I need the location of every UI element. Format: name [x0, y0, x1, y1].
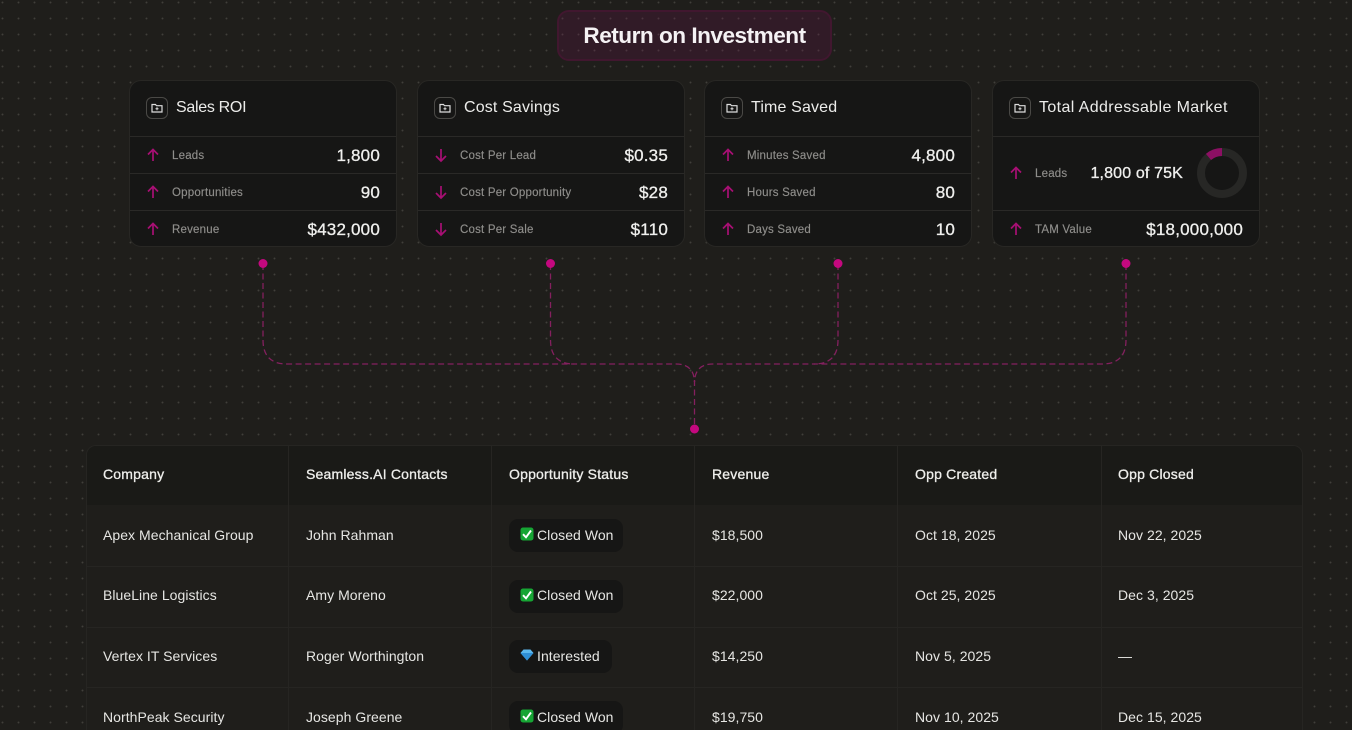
- metric: minutes saved: Minutes Saved: [747, 150, 826, 162]
- heading: sales roi: Sales ROI: [176, 99, 246, 116]
- row: vertex it services: [103, 640, 1132, 673]
- row: apex mechanical group: $18,500: [712, 527, 763, 543]
- status: interested: Interested: [537, 648, 600, 664]
- metric: opportunities: Opportunities: [172, 187, 243, 199]
- metric: minutes saved: 4,800: [911, 146, 955, 165]
- table header: Opp Closed: [1118, 466, 1194, 482]
- metric: cost per lead: [418, 136, 684, 173]
- row: apex mechanical group: [103, 519, 1202, 552]
- heading: time saved: Time Saved: [751, 99, 837, 116]
- row: vertex it services: Roger Worthington: [306, 648, 424, 664]
- table header: Opp Created: [915, 466, 997, 482]
- row: vertex it services: —: [1118, 648, 1132, 664]
- row: apex mechanical group: Apex Mechanical Group: [103, 527, 253, 543]
- row: northpeak security: NorthPeak Security: [103, 709, 225, 725]
- status: interested: [509, 640, 612, 673]
- table header: Company: [103, 466, 164, 482]
- table: [86, 445, 1303, 730]
- row: blueline logistics: $22,000: [712, 587, 763, 603]
- status: closed won: [509, 580, 623, 613]
- status: closed won: Closed Won: [537, 587, 614, 603]
- panel: time saved: [704, 80, 972, 247]
- status: closed won: Closed Won: [537, 709, 614, 725]
- metric: revenue: Revenue: [172, 224, 219, 236]
- metric: leads of tam: Leads: [1035, 168, 1067, 180]
- metric: cost per lead: Cost Per Lead: [460, 150, 536, 162]
- metric: leads: Leads: [172, 150, 204, 162]
- panel: total addressable market: [992, 80, 1260, 247]
- status: closed won: [509, 701, 623, 730]
- donut chart: [1197, 148, 1247, 198]
- row: northpeak security: [103, 701, 1202, 730]
- row: northpeak security: Nov 10, 2025: [915, 709, 999, 725]
- row: blueline logistics: [103, 580, 1194, 613]
- row: blueline logistics: Amy Moreno: [306, 587, 386, 603]
- status: closed won: [509, 519, 623, 552]
- metric: revenue: $432,000: [307, 220, 380, 239]
- metric: hours saved: [705, 173, 971, 210]
- table header: [87, 446, 1304, 505]
- title: Return on Investment: [583, 23, 806, 48]
- row: northpeak security: $19,750: [712, 709, 763, 725]
- metric: cost per lead: $0.35: [624, 146, 668, 165]
- row: northpeak security: Dec 15, 2025: [1118, 709, 1202, 725]
- metric: revenue: [130, 210, 396, 247]
- panel: cost savings: [417, 80, 685, 247]
- table header: Opportunity Status: [509, 466, 629, 482]
- metric: hours saved: Hours Saved: [747, 187, 816, 199]
- heading: total addressable market: [1009, 97, 1228, 119]
- metric: minutes saved: [705, 136, 971, 173]
- metric: days saved: [705, 210, 971, 247]
- metric: days saved: 10: [936, 220, 955, 239]
- row: vertex it services: Nov 5, 2025: [915, 648, 991, 664]
- row: vertex it services: Vertex IT Services: [103, 648, 217, 664]
- metric: leads: [130, 136, 396, 173]
- metric: opportunities: 90: [361, 183, 380, 202]
- table header: Seamless.AI Contacts: [306, 466, 448, 482]
- row: blueline logistics: BlueLine Logistics: [103, 587, 217, 603]
- metric: cost per sale: $110: [631, 220, 668, 239]
- heading: time saved: [721, 97, 837, 119]
- row: apex mechanical group: John Rahman: [306, 527, 394, 543]
- heading: sales roi: [146, 97, 246, 119]
- metric: cost per opportunity: $28: [639, 183, 668, 202]
- row: apex mechanical group: Oct 18, 2025: [915, 527, 996, 543]
- metric: hours saved: 80: [936, 183, 955, 202]
- metric: cost per sale: [418, 210, 684, 247]
- metric: tam value: TAM Value: [1035, 224, 1092, 236]
- metric: tam value: [993, 210, 1259, 247]
- metric: opportunities: [130, 173, 396, 210]
- status: closed won: Closed Won: [537, 527, 614, 543]
- metric: days saved: Days Saved: [747, 224, 811, 236]
- metric: leads of tam: [993, 136, 1259, 210]
- row: vertex it services: $14,250: [712, 648, 763, 664]
- title: [557, 10, 832, 61]
- metric: leads: 1,800: [336, 146, 380, 165]
- metric: cost per sale: Cost Per Sale: [460, 224, 534, 236]
- table header: Revenue: [712, 466, 769, 482]
- row: blueline logistics: Dec 3, 2025: [1118, 587, 1194, 603]
- heading: total addressable market: Total Addressable Market: [1039, 99, 1228, 116]
- panel: sales roi: [129, 80, 397, 247]
- row: blueline logistics: Oct 25, 2025: [915, 587, 996, 603]
- row: northpeak security: Joseph Greene: [306, 709, 402, 725]
- heading: cost savings: [434, 97, 560, 119]
- metric: cost per opportunity: Cost Per Opportunity: [460, 187, 571, 199]
- metric: cost per opportunity: [418, 173, 684, 210]
- metric: tam value: $18,000,000: [1146, 220, 1243, 239]
- row: apex mechanical group: Nov 22, 2025: [1118, 527, 1202, 543]
- metric: leads of tam: 1,800 of 75K: [1090, 165, 1183, 182]
- heading: cost savings: Cost Savings: [464, 99, 560, 116]
